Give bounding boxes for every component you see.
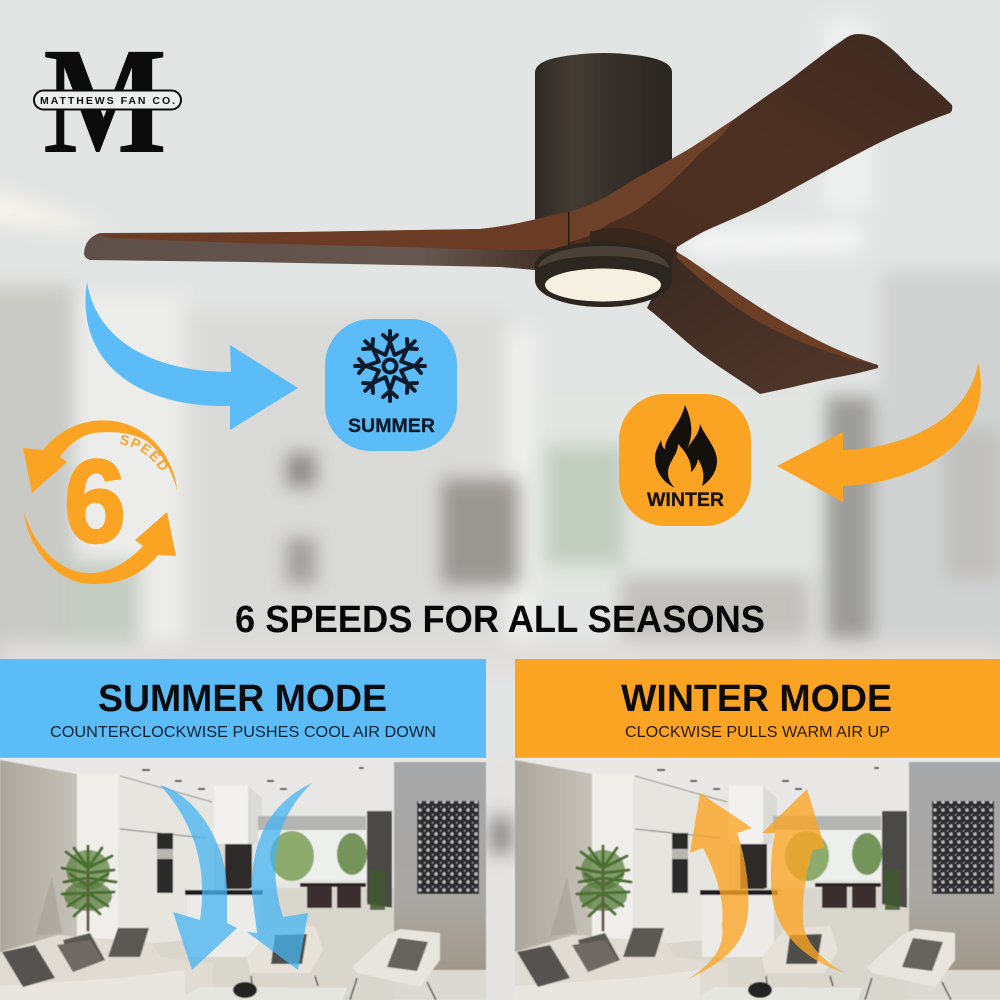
label: winter: WINTER xyxy=(647,490,724,511)
main heading: 6 SPEEDS FOR ALL SEASONS xyxy=(235,599,765,641)
numeral 6: 6 xyxy=(64,436,126,568)
summer mode title: SUMMER MODE xyxy=(98,678,387,720)
ceiling fan xyxy=(84,34,952,394)
logo: Matthews Fan Co.: M xyxy=(43,17,167,186)
blue arrow: left xyxy=(160,785,237,970)
orange arrow: left xyxy=(688,793,752,979)
fan blade: left xyxy=(84,212,568,270)
winter mode title: WINTER MODE xyxy=(621,678,892,720)
label: summer: SUMMER xyxy=(348,416,435,437)
light kit xyxy=(535,242,672,307)
photo: winter living room xyxy=(515,758,1000,1000)
light lens xyxy=(545,268,661,302)
winter mode caption: CLOCKWISE PULLS WARM AIR UP xyxy=(625,724,890,741)
photo: summer living room xyxy=(0,758,486,1000)
icon: 6 speed: SPEED xyxy=(120,435,168,470)
fan blade: lower right xyxy=(647,250,878,394)
arrow: blue to summer xyxy=(85,282,298,430)
upper circular arrow xyxy=(23,420,177,493)
fan blade: upper right xyxy=(540,34,952,262)
summer mode caption: COUNTERCLOCKWISE PUSHES COOL AIR DOWN xyxy=(50,724,436,741)
blue arrow: right xyxy=(247,783,312,970)
panel: winter mode header xyxy=(515,659,1000,758)
logo: Matthews Fan Co.: MATTHEWS FAN CO. xyxy=(40,95,175,107)
arrow: orange to winter xyxy=(777,362,981,502)
icon: flame xyxy=(655,405,717,488)
badge: winter xyxy=(619,394,751,526)
panel: summer mode header xyxy=(0,659,486,758)
icon: snowflake xyxy=(355,331,425,401)
fan housing xyxy=(535,53,672,225)
orange arrow: right xyxy=(762,789,845,973)
lower circular arrow xyxy=(24,512,176,584)
badge: summer xyxy=(325,319,457,451)
speed curved label xyxy=(119,444,167,484)
icon: 6 speed xyxy=(23,420,177,584)
